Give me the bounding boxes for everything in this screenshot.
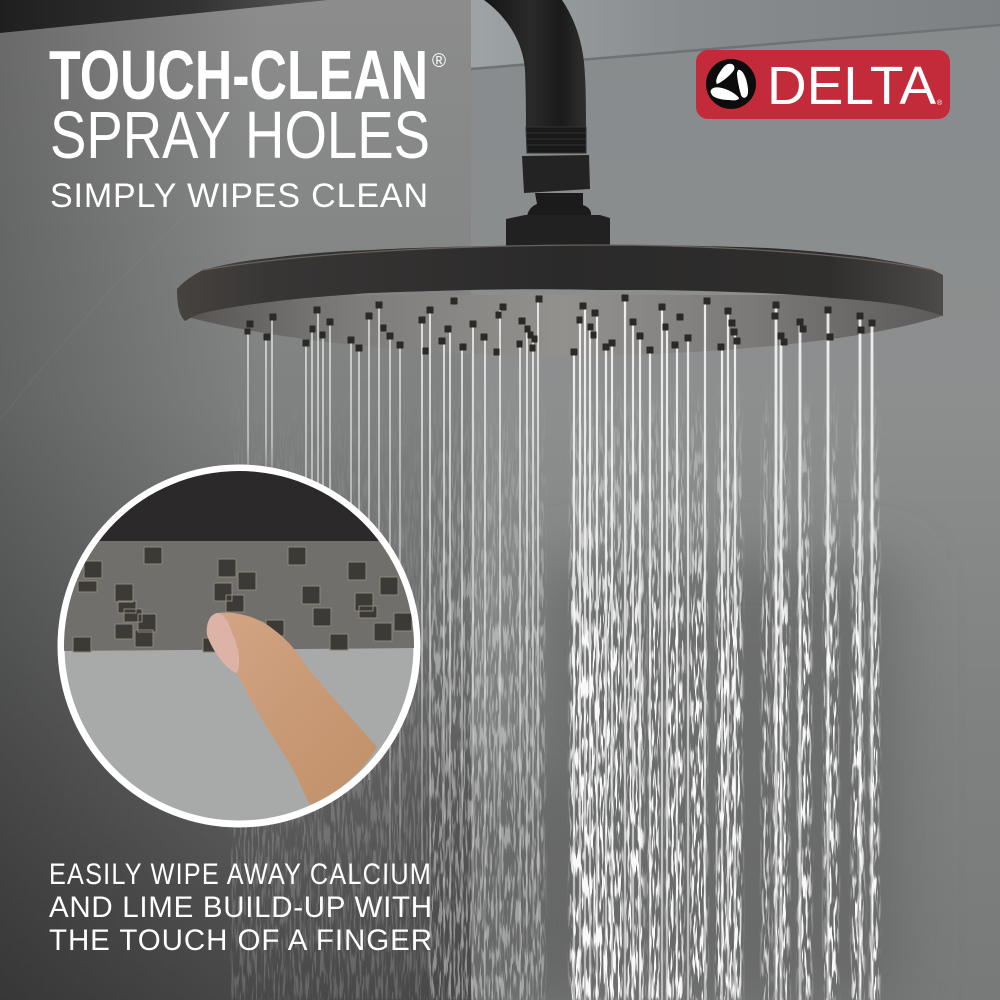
far right streams xyxy=(776,307,872,1000)
black circle emblem xyxy=(706,59,756,109)
close-up contents xyxy=(60,465,420,805)
shower arm and mount xyxy=(484,0,610,248)
white circle frame xyxy=(61,468,417,824)
rim edge highlight xyxy=(203,245,933,270)
dark rim xyxy=(99,471,379,541)
registered mark: ® xyxy=(432,51,446,72)
line 3: THE TOUCH OF A FINGER xyxy=(49,924,432,957)
left streams xyxy=(306,306,400,860)
fingernail xyxy=(207,613,239,673)
DELTA wordmark: DELTA xyxy=(767,56,936,116)
subheading: SPRAY HOLES: SPRAY HOLES xyxy=(50,98,430,173)
water droplet texture xyxy=(230,380,900,1000)
short fine streams at far left xyxy=(248,320,272,480)
centre streams xyxy=(422,300,538,1000)
inset circle: finger wiping spray holes xyxy=(60,465,420,824)
threaded collar xyxy=(526,127,586,153)
emblem white petals xyxy=(711,64,748,100)
falling water streams xyxy=(248,299,872,1000)
red badge xyxy=(696,50,950,119)
Delta logo badge xyxy=(696,50,950,119)
rim band xyxy=(177,245,943,321)
line 2: AND LIME BUILD-UP WITH xyxy=(49,891,432,924)
hex nut xyxy=(522,155,590,193)
line 1: EASILY WIPE AWAY CALCIUM xyxy=(49,858,432,891)
dark shadow at top left corner xyxy=(0,0,328,33)
underside face plate xyxy=(184,295,942,356)
metal plate xyxy=(60,541,420,651)
benefit caption xyxy=(49,858,432,957)
shower head xyxy=(177,245,943,356)
left marble wall xyxy=(0,0,471,1000)
flange xyxy=(506,215,610,248)
close-up nozzles xyxy=(73,547,412,652)
right tile wall xyxy=(471,0,1000,1000)
neck and dome xyxy=(527,193,591,216)
finger xyxy=(207,613,377,805)
spray nozzles on shower head xyxy=(245,295,875,355)
curved arm xyxy=(484,0,586,128)
right streams xyxy=(574,299,735,1000)
heading: TOUCH-CLEAN: TOUCH-CLEAN xyxy=(49,36,428,114)
logo registered mark: ® xyxy=(937,99,943,107)
tagline: SIMPLY WIPES CLEAN xyxy=(50,177,428,215)
title block xyxy=(49,36,446,215)
